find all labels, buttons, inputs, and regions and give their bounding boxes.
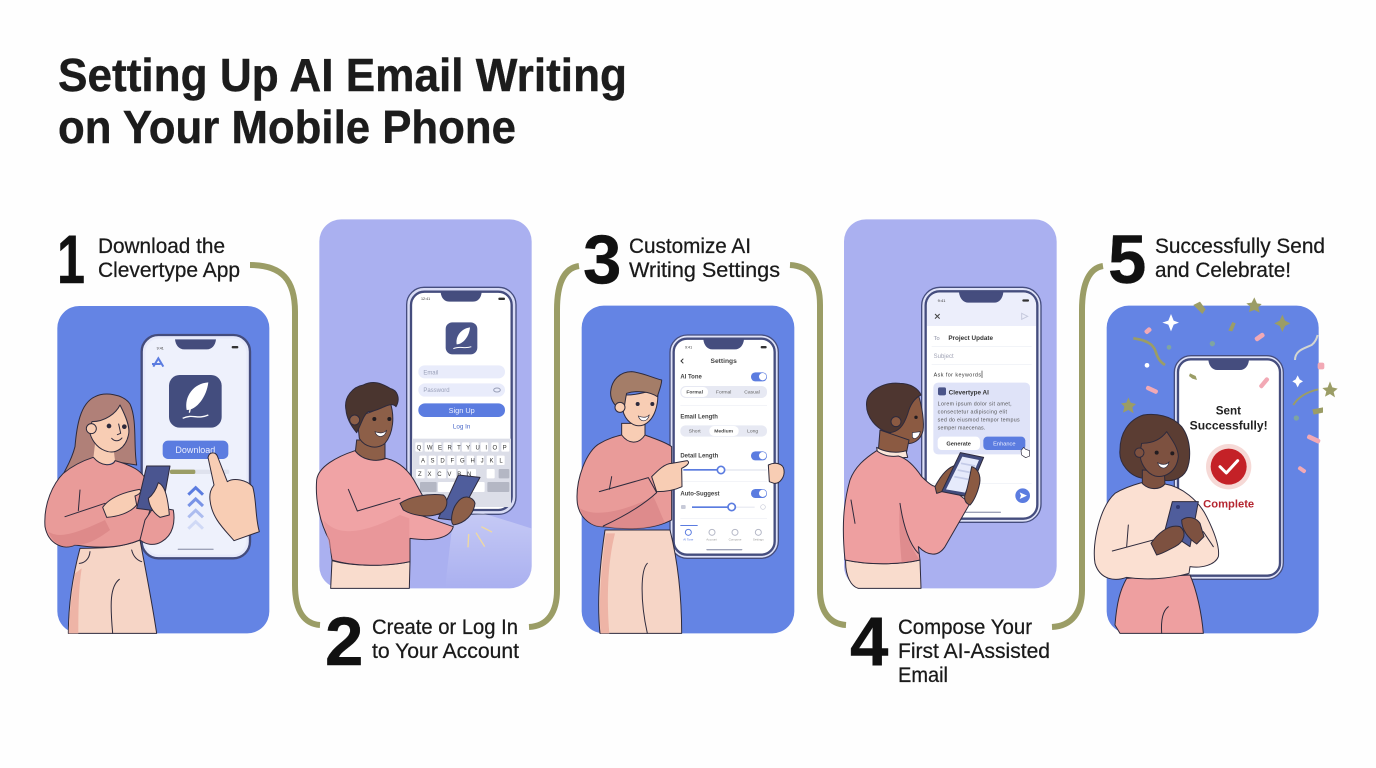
person: man seen from behind	[843, 383, 984, 588]
phone: settings screen: Formal	[716, 390, 731, 396]
phone: settings screen: AI Tone	[680, 375, 703, 381]
phone: settings screen: Short	[689, 429, 701, 435]
step 1 heading: Clevertype App	[98, 259, 240, 282]
connector: step 2 to step 3	[529, 266, 579, 627]
person: man signing up	[316, 383, 480, 588]
step 1 heading: Download the	[98, 235, 225, 258]
phone: sign up screen: Q W E R T Y U I O P	[417, 445, 507, 451]
step 4 heading: 4	[850, 603, 888, 680]
title: on Your Mobile Phone	[58, 101, 516, 153]
phone: compose screen: Clevertype AI	[949, 389, 989, 396]
phone: compose screen: To	[934, 336, 940, 342]
panel: step 1 illustration	[45, 306, 269, 633]
phone: sign up screen: Sign Up	[449, 406, 475, 415]
connector: step 3 to step 4	[790, 265, 846, 625]
step 5 heading: 5	[1108, 221, 1146, 298]
phone: sign up screen: A S D F G H J K L	[421, 459, 503, 465]
phone: download screen	[142, 335, 250, 558]
phone: settings screen: Settings	[753, 538, 764, 542]
phone: sent success screen	[1174, 356, 1283, 579]
step 1 heading: 1	[57, 221, 85, 298]
phone: settings screen: Compose	[729, 538, 742, 542]
title	[58, 49, 627, 153]
panel: step 2 illustration	[316, 219, 532, 588]
phone: settings screen	[670, 335, 778, 558]
phone: sign up screen: Email	[423, 370, 438, 376]
step 4 heading: Compose Your	[898, 616, 1032, 639]
phone: settings screen: Casual	[744, 390, 760, 396]
phone: compose screen: Generate	[946, 441, 971, 447]
step 3 heading: 3	[583, 221, 621, 298]
step 2 heading: to Your Account	[372, 640, 519, 663]
phone: settings screen: Medium	[714, 429, 734, 435]
phone: compose screen: sed do eiusmod tempor tempus	[938, 418, 1020, 424]
step 3 heading: Writing Settings	[629, 259, 780, 282]
phone: settings screen: AI Tone	[683, 538, 694, 542]
step 5 heading	[1108, 221, 1325, 298]
phone: compose screen: Lorem ipsum dolor sit amet,	[938, 402, 1012, 408]
step 3 heading: Customize AI	[629, 235, 751, 258]
phone: compose screen: Subject	[934, 354, 954, 360]
phone: compose screen: Enhance	[993, 441, 1016, 447]
phone: compose screen: 9:41	[938, 298, 946, 303]
step 1 heading	[57, 221, 240, 298]
step 5 heading: and Celebrate!	[1155, 259, 1291, 282]
phone: settings screen: Email Length	[680, 415, 718, 421]
phone: sign up screen: Password	[423, 388, 450, 394]
step 4 heading: Email	[898, 664, 948, 687]
confetti	[1121, 297, 1338, 474]
phone: settings screen: Long	[747, 429, 758, 435]
phone: sign up screen	[407, 287, 516, 514]
phone: compose screen: consectetur adipiscing elit	[938, 410, 1008, 416]
phone: sign up screen: Log In	[453, 424, 471, 431]
phone: settings screen: Detail Length	[680, 454, 719, 460]
phone: compose screen: Ask for keywords	[934, 372, 981, 378]
phone: settings screen: Auto-Suggest	[680, 491, 720, 497]
person: man pointing at settings	[577, 372, 784, 633]
phone: compose screen: semper maecenas.	[938, 426, 985, 432]
phone: download screen: Download	[175, 445, 215, 455]
phone: settings screen: Formal	[686, 390, 704, 396]
phone: sent success screen: Sent	[1216, 405, 1241, 418]
connector: step 1 to step 2	[250, 265, 320, 625]
step 3 heading	[583, 221, 780, 298]
phone: sent success screen: Complete	[1203, 498, 1254, 510]
phone: sent success screen: Successfully!	[1190, 420, 1268, 433]
step 5 heading: Successfully Send	[1155, 235, 1325, 258]
step 4 heading	[850, 603, 1050, 687]
phone: download screen: 9:41	[157, 346, 164, 350]
light glow with rays	[445, 513, 531, 588]
title: Setting Up AI Email Writing	[58, 49, 627, 101]
phone: sign up screen: Z X C V B N	[418, 472, 471, 478]
phone: settings screen: 9:41	[685, 346, 692, 350]
step 2 heading: Create or Log In	[372, 616, 518, 639]
hand tapping download	[208, 453, 259, 541]
phone: sign up screen: 12:41	[421, 297, 430, 301]
person: woman celebrating	[1094, 414, 1219, 633]
panel: step 4 illustration	[843, 219, 1057, 588]
step 4 heading: First AI-Assisted	[898, 640, 1050, 663]
panel: step 5 illustration	[1094, 297, 1338, 633]
phone: settings screen: Settings	[711, 358, 737, 365]
panel: step 3 illustration	[577, 306, 794, 633]
connector: step 4 to step 5	[1052, 266, 1103, 627]
phone: settings screen: Account	[706, 538, 717, 542]
step 2 heading: 2	[325, 603, 363, 680]
step 2 heading	[325, 603, 519, 680]
person: woman with phone	[45, 394, 174, 633]
phone: compose screen: Project Update	[948, 335, 993, 342]
phone: compose screen	[922, 287, 1041, 522]
